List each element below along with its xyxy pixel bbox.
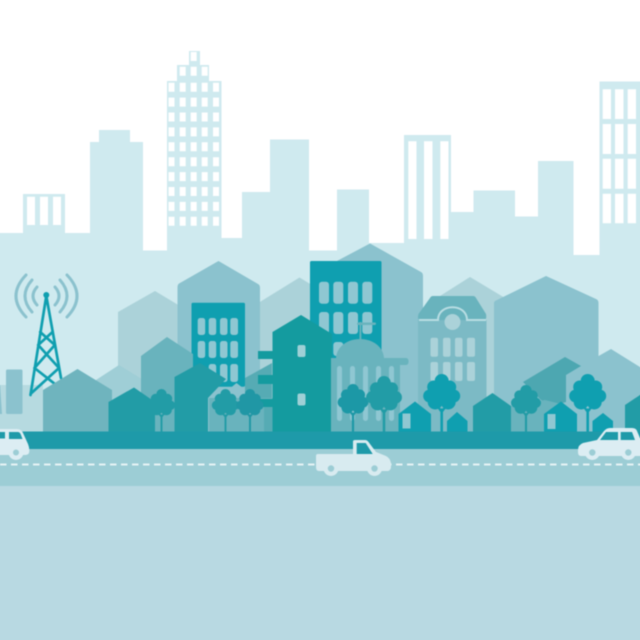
signal arcs <box>16 275 77 317</box>
road dashes <box>0 464 640 466</box>
pickup truck <box>316 440 391 476</box>
mid-tone large houses <box>178 244 640 432</box>
lower panel <box>0 486 640 640</box>
background skyline <box>0 51 640 440</box>
pale background houses <box>96 277 505 432</box>
car <box>578 428 640 460</box>
ground strip <box>0 432 640 449</box>
clock tower building <box>418 296 486 432</box>
trees <box>148 374 606 432</box>
foreground small houses <box>398 393 640 432</box>
radio tower <box>30 292 61 395</box>
mid houses <box>141 337 581 432</box>
domed capitol building <box>331 322 408 432</box>
house with shoulder <box>108 388 155 432</box>
teal tall building centre <box>310 261 382 371</box>
teal tall building left <box>192 303 245 387</box>
van <box>0 429 29 460</box>
main green-teal building <box>258 315 332 432</box>
road <box>0 449 640 486</box>
far left low buildings <box>0 370 43 432</box>
house centre-left <box>174 363 226 432</box>
house left foreground <box>43 369 112 432</box>
skyline windows <box>27 52 636 239</box>
